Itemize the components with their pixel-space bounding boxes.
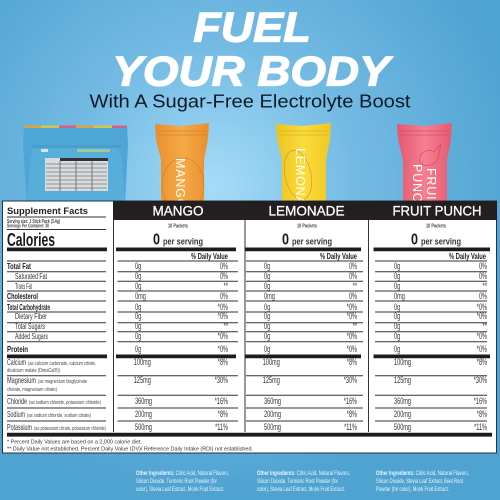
fruit punch column: 0g xyxy=(394,261,400,271)
fruit punch column: 200mg xyxy=(394,409,411,419)
mango column: 0g xyxy=(135,331,141,341)
mango column: *30% xyxy=(215,375,228,385)
serving info: Serving size: 1 Stick Pack (3.4g) xyxy=(7,219,60,225)
footnotes xyxy=(7,440,253,452)
supplement facts panel xyxy=(2,201,497,453)
row labels: (as sodium chloride, sodium citrate) xyxy=(27,413,91,419)
product: fruit punch stick pack: PUNCH xyxy=(410,164,424,212)
lemonade column: 0g xyxy=(264,331,270,341)
fruit punch column: 0g xyxy=(394,281,400,291)
fruit punch column: *0% xyxy=(477,331,487,341)
title xyxy=(112,5,393,95)
lemonade column: *0% xyxy=(347,331,357,341)
thick rules xyxy=(7,249,492,435)
other ingredients: fruit punch xyxy=(376,470,469,493)
mango column: 0% xyxy=(220,291,228,301)
mango column: 0g xyxy=(135,281,141,291)
mango column: 10 Packets xyxy=(168,224,188,230)
row labels: dicalcium malate (DimaCal®)) xyxy=(7,367,60,374)
other ingredients: fruit punch: Powder (for color), Monk Fruit Extract. xyxy=(376,486,449,493)
fruit punch column: *8% xyxy=(477,409,487,419)
row labels: Potassium xyxy=(7,422,32,432)
fruit punch column: 0% xyxy=(479,271,487,281)
fruit punch column: *0% xyxy=(477,311,487,321)
mango column: *0% xyxy=(218,302,228,312)
mango column: per serving xyxy=(163,236,203,248)
lemonade column: *30% xyxy=(344,375,357,385)
row labels xyxy=(7,261,106,432)
mango column: 0g xyxy=(135,302,141,312)
lemonade column: 0g xyxy=(264,344,270,354)
other ingredients: lemonade: Other Ingredients: Citric Acid, Natural Flavors, xyxy=(257,470,350,477)
row labels: Total Fat xyxy=(7,261,31,271)
mango column: ** xyxy=(224,321,228,331)
lemonade column: 100mg xyxy=(263,357,280,367)
lemonade column: ** xyxy=(353,321,357,331)
row labels: chelate, magnesium citrate) xyxy=(7,387,57,393)
calories label: Calories xyxy=(7,230,55,250)
mango column: *8% xyxy=(218,409,228,419)
lemonade column: *0% xyxy=(347,344,357,354)
lemonade column: 200mg xyxy=(264,409,281,419)
lemonade column: 0g xyxy=(264,271,270,281)
mango column: *0% xyxy=(218,311,228,321)
mango column xyxy=(118,224,238,432)
lemonade column: 10 Packets xyxy=(297,224,317,230)
row labels: Cholesterol xyxy=(7,291,38,301)
row labels: Added Sugars xyxy=(15,331,48,341)
other ingredients: mango: Other Ingredients: Citric Acid, Natural Flavors, xyxy=(136,470,229,477)
row labels: Sodium xyxy=(7,409,25,419)
fruit punch column: 125mg xyxy=(394,375,411,385)
title: FUEL xyxy=(193,5,311,51)
mango column: *0% xyxy=(218,344,228,354)
lemonade column: % Daily Value xyxy=(320,251,357,261)
lemonade column: 500mg xyxy=(264,422,281,432)
title: YOUR BODY xyxy=(112,48,393,95)
fruit punch column: ** xyxy=(483,281,487,291)
fruit punch column: per serving xyxy=(421,236,461,248)
other ingredients: mango: Silicon Dioxide, Turmeric Root Powder (for xyxy=(136,478,218,485)
fruit punch column: 360mg xyxy=(394,396,411,406)
left column rules xyxy=(7,217,106,421)
mango column: 125mg xyxy=(134,375,151,385)
row labels: Protein xyxy=(7,344,28,354)
lemonade column: 125mg xyxy=(263,375,280,385)
lemonade column: ** xyxy=(353,281,357,291)
mango column: *16% xyxy=(215,396,228,406)
lemonade column: *8% xyxy=(347,409,357,419)
row labels: Calcium xyxy=(7,357,26,367)
lemonade column: *0% xyxy=(347,311,357,321)
mango column: % Daily Value xyxy=(191,251,228,261)
serving info: Servings Per Container: 30 xyxy=(7,224,49,230)
pack label: MANGO xyxy=(173,158,187,209)
mango column: 0g xyxy=(135,311,141,321)
lemonade column: 0g xyxy=(264,321,270,331)
row labels: Total Carbohydrate xyxy=(7,302,50,312)
fruit punch column: 0 xyxy=(411,232,418,248)
lemonade column: 0% xyxy=(349,291,357,301)
lemonade column: per serving xyxy=(292,236,332,248)
other ingredients: lemonade xyxy=(257,470,350,493)
mango column: 200mg xyxy=(135,409,152,419)
other ingredients: lemonade: color), Stevia Leaf Extract, Monk Fruit Extract. xyxy=(257,486,345,493)
row labels: (as potassium citrate, potassium chloride) xyxy=(34,426,106,432)
other ingredients: mango xyxy=(136,470,229,493)
fruit punch column: 10 Packets xyxy=(426,224,446,230)
mango column: ** xyxy=(224,281,228,291)
footnotes: ** Daily Value not established. Percent Daily Value (DV)/ Reference Daily Intake (RDI) not established. xyxy=(7,446,253,452)
fruit punch column: *11% xyxy=(474,422,487,432)
mini facts panel xyxy=(45,158,108,191)
fruit punch column: 500mg xyxy=(394,422,411,432)
mango column: 0mg xyxy=(135,291,146,301)
mango column: 0g xyxy=(135,344,141,354)
row labels: Total Sugars xyxy=(15,321,45,331)
row labels: Magnesium xyxy=(7,375,36,385)
product: fruit punch stick pack xyxy=(397,123,452,212)
fruit punch column: *8% xyxy=(477,357,487,367)
lemonade column: 0% xyxy=(349,271,357,281)
fruit punch column: *30% xyxy=(474,375,487,385)
mango column: *0% xyxy=(218,331,228,341)
fruit punch column xyxy=(375,224,487,432)
row labels: (as magnesium bisglycinate xyxy=(38,379,87,385)
lemonade column: 0g xyxy=(264,302,270,312)
lemonade column: 0g xyxy=(264,311,270,321)
other ingredients: fruit punch: Other Ingredients: Citric Acid, Natural Flavors, xyxy=(376,470,469,477)
serving info xyxy=(7,219,60,230)
product: blue supplement pouch xyxy=(23,126,128,203)
subtitle: With A Sugar-Free Electrolyte Boost xyxy=(90,92,410,112)
mango column: 0% xyxy=(220,261,228,271)
lemonade column: 0g xyxy=(264,261,270,271)
flavor heading: mango: MANGO xyxy=(152,202,204,218)
mango column: 500mg xyxy=(135,422,152,432)
lemonade column: *0% xyxy=(347,302,357,312)
flavor heading: lemonade: LEMONADE xyxy=(268,202,344,218)
row labels: Chloride xyxy=(7,396,27,406)
pack label: FRUIT xyxy=(424,168,438,209)
lemonade column: *8% xyxy=(347,357,357,367)
mango column: 0g xyxy=(135,271,141,281)
row labels: Trans Fat xyxy=(15,281,32,291)
fruit punch column: 100mg xyxy=(394,357,411,367)
other ingredients: mango: color), Stevia Leaf Extract, Monk Fruit Extract. xyxy=(136,486,224,493)
lemonade column: 0% xyxy=(349,261,357,271)
mango column: *11% xyxy=(215,422,228,432)
lemonade column: 0g xyxy=(264,281,270,291)
pack label: LEMONADE xyxy=(293,148,307,225)
other ingredients: lemonade: Silicon Dioxide, Turmeric Root Powder (for xyxy=(257,478,339,485)
mango column: *8% xyxy=(218,357,228,367)
lemonade column: 0mg xyxy=(264,291,275,301)
fruit punch column: ** xyxy=(483,321,487,331)
row labels: (as sodium chloride, potassium chloride) xyxy=(29,400,101,406)
mango column: 0g xyxy=(135,321,141,331)
mango column: 360mg xyxy=(135,396,152,406)
lemonade column: *16% xyxy=(344,396,357,406)
row labels: (as calcium carbonate, calcium citrate, xyxy=(28,361,96,367)
fruit punch column: *0% xyxy=(477,302,487,312)
heading: supplement facts: Supplement Facts xyxy=(7,206,88,217)
fruit punch column: 0g xyxy=(394,271,400,281)
product: lemonade stick pack xyxy=(276,123,331,225)
footnotes: * Percent Daily Values are based on a 2,000 calorie diet. xyxy=(7,440,142,446)
column dividers xyxy=(114,220,368,432)
mango column: 0 xyxy=(153,232,160,248)
fruit punch column: 0g xyxy=(394,331,400,341)
lemonade column: 0 xyxy=(282,232,289,248)
fruit punch column: 0g xyxy=(394,311,400,321)
flavor header band xyxy=(113,201,497,220)
fruit punch column: 0g xyxy=(394,344,400,354)
fruit punch column: 0g xyxy=(394,321,400,331)
fruit punch column: *16% xyxy=(474,396,487,406)
lemonade column: 360mg xyxy=(264,396,281,406)
product: mango stick pack xyxy=(155,123,209,212)
flavor heading: fruit punch: FRUIT PUNCH xyxy=(392,202,482,218)
mango column: 100mg xyxy=(134,357,151,367)
mango column: 0% xyxy=(220,271,228,281)
fruit punch column: 0% xyxy=(479,291,487,301)
lemonade column: *11% xyxy=(344,422,357,432)
row labels: Saturated Fat xyxy=(15,271,47,281)
fruit punch column: 0mg xyxy=(394,291,405,301)
fruit punch column: 0% xyxy=(479,261,487,271)
fruit punch column: *0% xyxy=(477,344,487,354)
mango column: 0g xyxy=(135,261,141,271)
row labels: Dietary Fiber xyxy=(15,311,47,321)
lemonade column xyxy=(246,224,363,432)
fruit punch column: 0g xyxy=(394,302,400,312)
